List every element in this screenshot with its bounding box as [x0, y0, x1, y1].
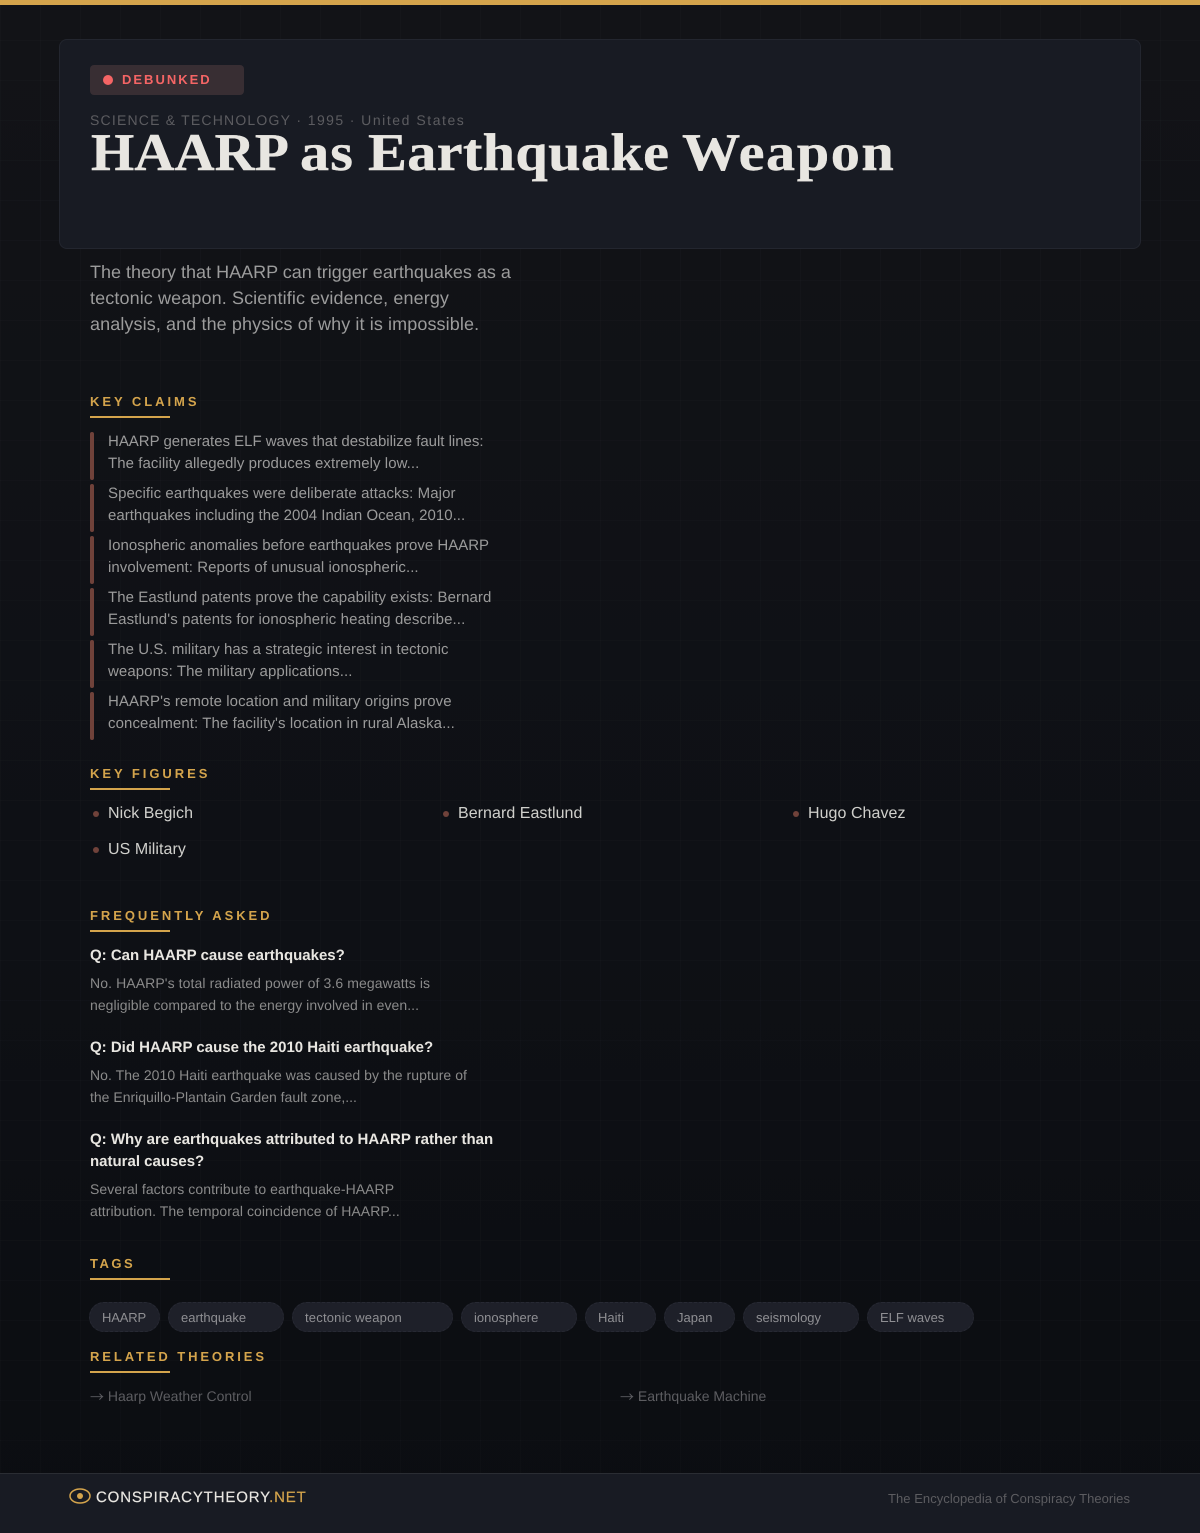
- question 3: natural causes?: [90, 1153, 204, 1170]
- related link: Haarp Weather Control: → Haarp Weather Control: [90, 1387, 252, 1407]
- claim 6: concealment: The facility's location in rural Alaska...: [108, 715, 455, 732]
- footer logo text: CONSPIRACYTHEORY.NET: [96, 1489, 307, 1506]
- claim 5: [90, 640, 449, 688]
- question 2: Q: Did HAARP cause the 2010 Haiti earthquake?: [90, 1039, 433, 1056]
- panel: header: [59, 39, 1141, 249]
- title: Weapon: [682, 124, 895, 182]
- tag: Haiti: Haiti: [598, 1310, 624, 1325]
- claim 6: HAARP's remote location and military origins prove: [108, 693, 452, 710]
- heading: frequently asked: FREQUENTLY ASKED: [90, 908, 273, 923]
- title: [91, 124, 895, 182]
- badge label: DEBUNKED: [122, 72, 212, 87]
- tag: ELF waves: ELF waves: [880, 1310, 944, 1325]
- answer 1: negligible compared to the energy involved in even...: [90, 997, 419, 1013]
- footer tagline: The Encyclopedia of Conspiracy Theories: [888, 1491, 1130, 1506]
- tag: seismology: [743, 1302, 859, 1332]
- answer 2: the Enriquillo-Plantain Garden fault zone,...: [90, 1089, 357, 1105]
- tag: ELF waves: [867, 1302, 974, 1332]
- tag row: [89, 1302, 974, 1332]
- figure: Bernard Eastlund: Bernard Eastlund: [458, 805, 582, 822]
- heading: tags: TAGS: [90, 1256, 135, 1271]
- title: HAARP: [91, 124, 289, 182]
- claim 2: earthquakes including the 2004 Indian Ocean, 2010...: [108, 507, 465, 524]
- claim 1: The facility allegedly produces extremely low...: [108, 455, 419, 472]
- claim 2: Specific earthquakes were deliberate attacks: Major: [108, 485, 456, 502]
- claim 1: HAARP generates ELF waves that destabilize fault lines:: [108, 433, 484, 450]
- title: Earthquake: [368, 124, 669, 182]
- answer 2: [90, 1067, 467, 1105]
- top accent bar: [0, 0, 1200, 5]
- tag: earthquake: [168, 1302, 284, 1332]
- footer: [0, 1473, 1200, 1533]
- icon: eye logo: [69, 1488, 91, 1504]
- question 3: [90, 1131, 493, 1170]
- tag: Japan: [664, 1302, 735, 1332]
- tag: tectonic weapon: [292, 1302, 453, 1332]
- claim 4: The Eastlund patents prove the capability exists: Bernard: [108, 589, 491, 606]
- claim 4: Eastlund's patents for ionospheric heating describe...: [108, 611, 465, 628]
- heading: key claims: KEY CLAIMS: [90, 394, 199, 409]
- answer 3: attribution. The temporal coincidence of HAARP...: [90, 1203, 400, 1219]
- tag: HAARP: HAARP: [102, 1310, 146, 1325]
- tag: earthquake: earthquake: [181, 1310, 246, 1325]
- answer 2: No. The 2010 Haiti earthquake was caused by the rupture of: [90, 1067, 467, 1083]
- claim 3: [90, 536, 489, 584]
- answer 3: [90, 1181, 400, 1219]
- figure: Hugo Chavez: Hugo Chavez: [808, 805, 906, 822]
- intro text: [90, 262, 511, 334]
- figure: Nick Begich: Nick Begich: [108, 805, 193, 822]
- claim 5: The U.S. military has a strategic interest in tectonic: [108, 641, 449, 658]
- claim 6: [90, 692, 455, 740]
- answer 1: [90, 975, 430, 1013]
- question 1: Q: Can HAARP cause earthquakes?: [90, 947, 345, 964]
- tag: HAARP: [89, 1302, 160, 1332]
- intro text: The theory that HAARP can trigger earthquakes as a: [90, 262, 511, 282]
- category and date line: SCIENCE & TECHNOLOGY · 1995 · United States: [90, 112, 465, 128]
- answer 1: No. HAARP's total radiated power of 3.6 megawatts is: [90, 975, 430, 991]
- tag: seismology: seismology: [756, 1310, 821, 1325]
- claim 4: [90, 588, 491, 636]
- tag: Haiti: [585, 1302, 656, 1332]
- claim 2: [90, 484, 465, 532]
- tag: Japan: Japan: [677, 1310, 712, 1325]
- claim 3: involvement: Reports of unusual ionospheric...: [108, 559, 419, 576]
- related link: Earthquake Machine: → Earthquake Machine: [620, 1387, 766, 1407]
- tag: ionosphere: ionosphere: [474, 1310, 538, 1325]
- tag: ionosphere: [461, 1302, 577, 1332]
- answer 3: Several factors contribute to earthquake-HAARP: [90, 1181, 394, 1197]
- claim 3: Ionospheric anomalies before earthquakes prove HAARP: [108, 537, 489, 554]
- tag: tectonic weapon: tectonic weapon: [305, 1310, 402, 1325]
- figure: US Military: US Military: [108, 841, 186, 858]
- claim 5: weapons: The military applications...: [108, 663, 352, 680]
- icon: status dot: [103, 75, 113, 85]
- intro text: analysis, and the physics of why it is impossible.: [90, 314, 479, 334]
- heading: related theories: RELATED THEORIES: [90, 1349, 267, 1364]
- title: as: [300, 124, 354, 182]
- claims list: [90, 432, 491, 740]
- intro text: tectonic weapon. Scientific evidence, energy: [90, 288, 449, 308]
- question 3: Q: Why are earthquakes attributed to HAARP rather than: [90, 1131, 493, 1148]
- status badge: debunked: [90, 65, 244, 95]
- heading: key figures: KEY FIGURES: [90, 766, 210, 781]
- claim 1: [90, 432, 484, 480]
